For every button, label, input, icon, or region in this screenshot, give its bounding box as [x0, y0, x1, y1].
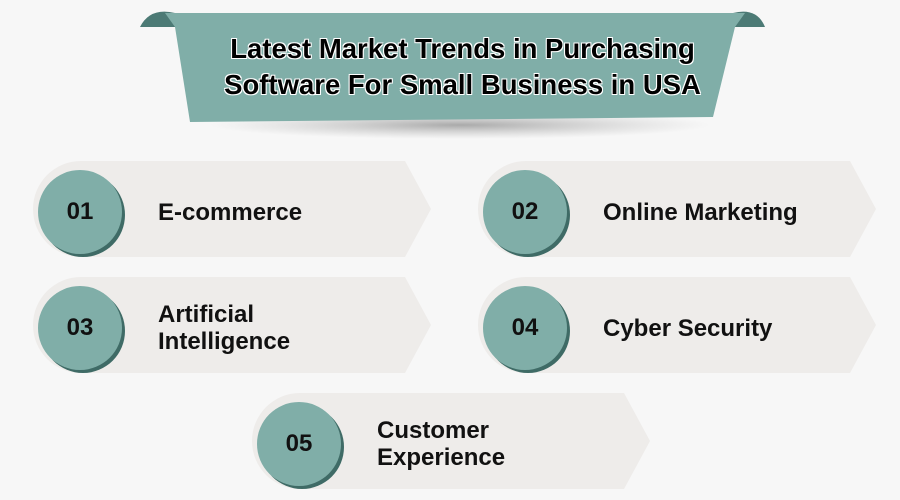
card 01 [33, 161, 431, 257]
title text: Software For Small Business in USA [224, 69, 701, 100]
title text: Latest Market Trends in Purchasing [230, 33, 695, 64]
card 05: Customer [377, 417, 489, 444]
card 05: 05 [286, 430, 312, 457]
card 03: Artificial [158, 301, 254, 328]
card 03: 03 [67, 314, 93, 341]
card 03: Intelligence [158, 328, 290, 355]
title banner [140, 12, 765, 137]
card 01: 01 [67, 198, 93, 225]
card 05 [252, 393, 650, 489]
card 02: 02 [512, 198, 538, 225]
card 04: 04 [512, 314, 538, 341]
card 02 [478, 161, 876, 257]
card 05: Experience [377, 444, 505, 471]
card 04 [478, 277, 876, 373]
card 02: Online Marketing [603, 198, 798, 226]
title text [224, 33, 702, 100]
card 03 [33, 277, 431, 373]
card 01: E-commerce [158, 198, 302, 226]
card 04: Cyber Security [603, 314, 772, 342]
